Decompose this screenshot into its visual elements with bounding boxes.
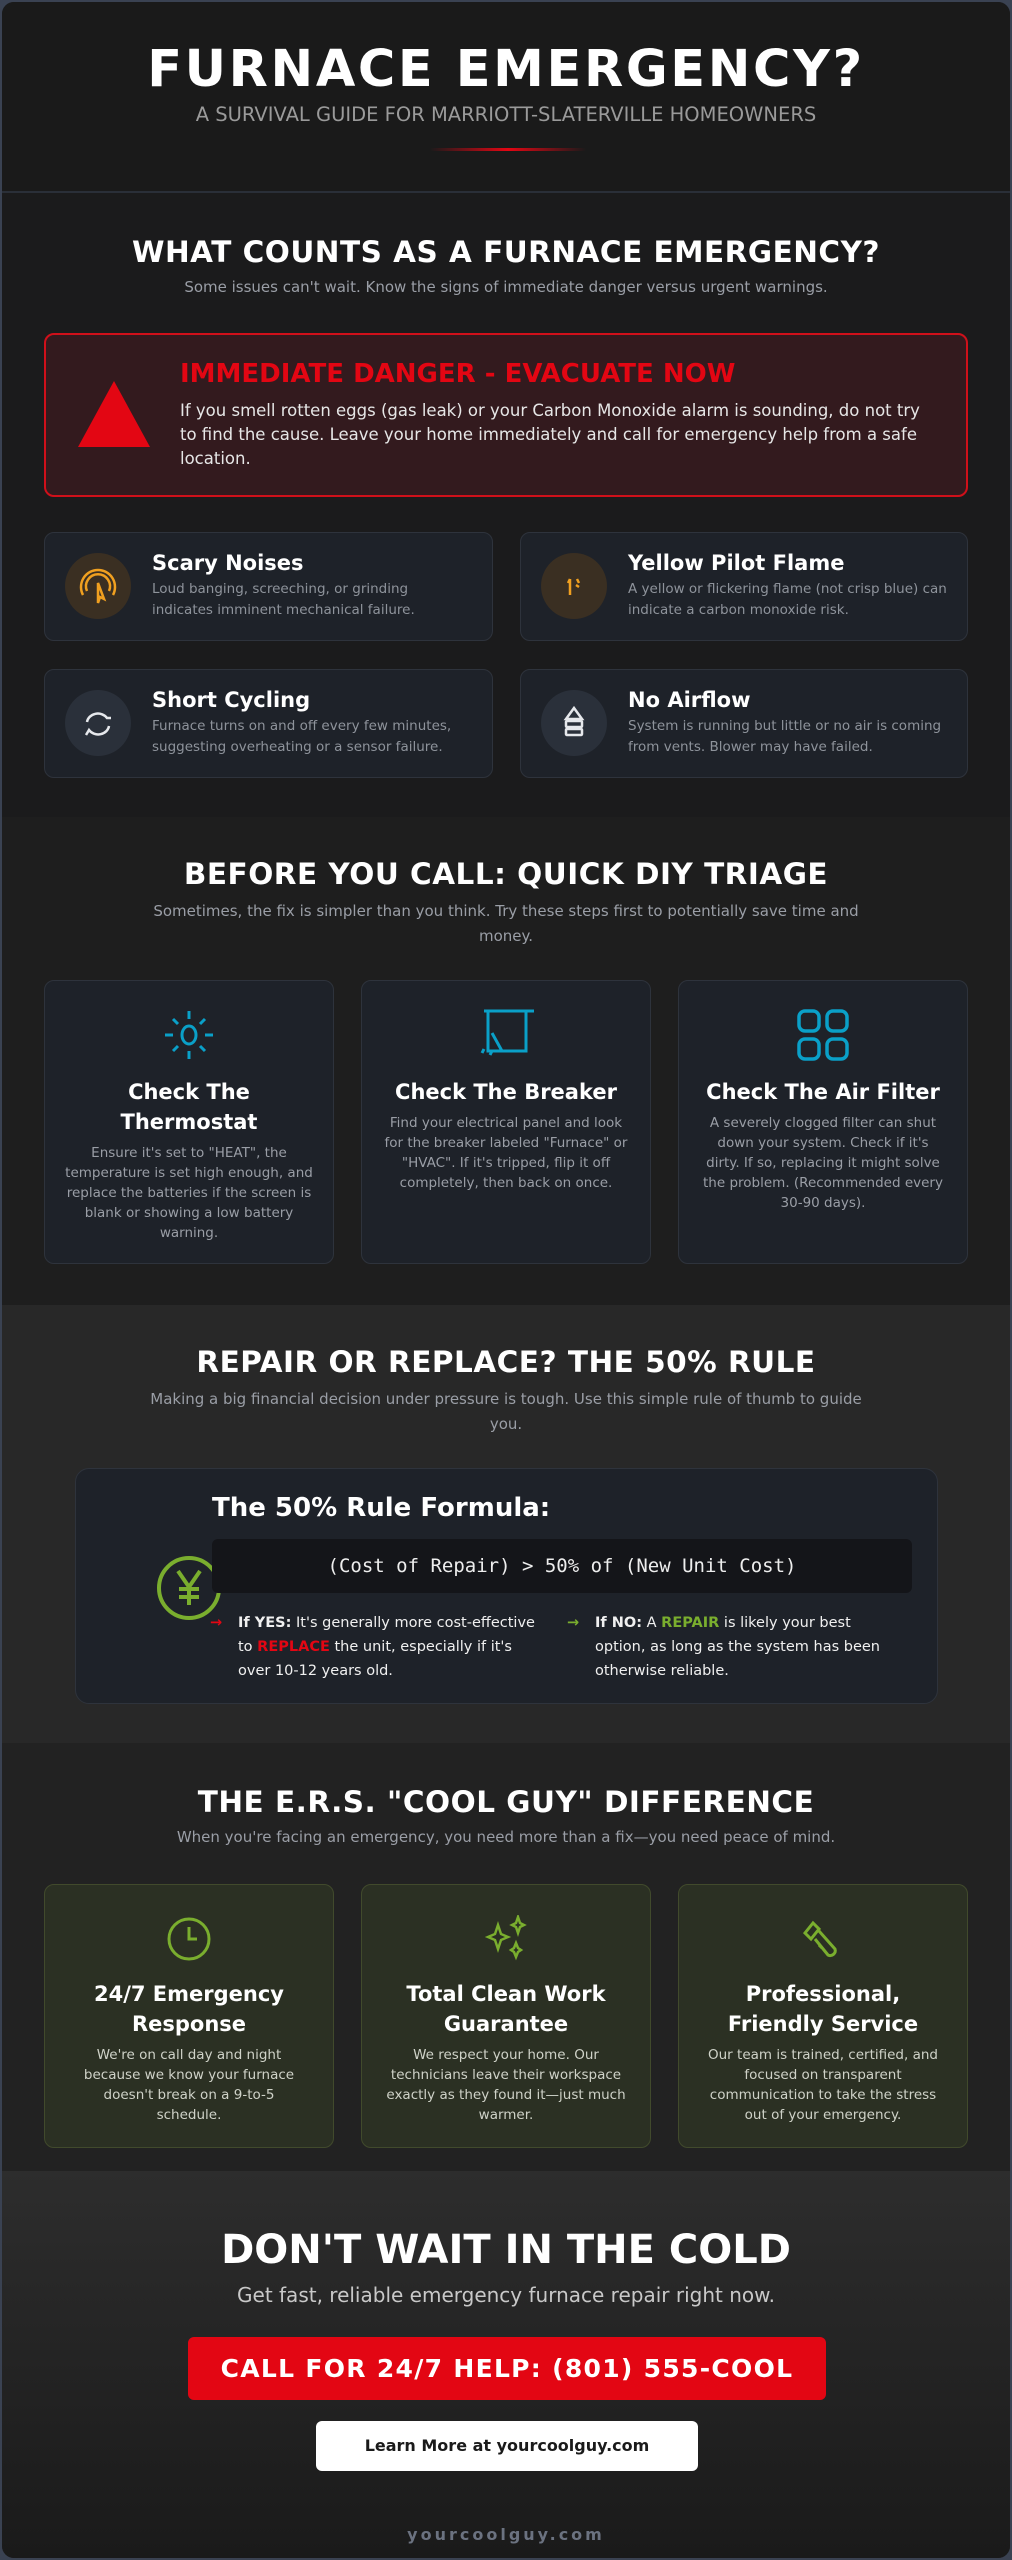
CTA subheading: Get fast, reliable emergency furnace repair right now. xyxy=(237,2283,775,2307)
icon: airflow xyxy=(541,690,607,756)
section: DIY triage xyxy=(2,817,1010,1305)
danger text: If you smell rotten eggs (gas leak) or your Carbon Monoxide alarm is sounding, do not try to find the cause. Leave your home immediately and call for emergency help from a safe location. xyxy=(180,401,920,468)
subheading: When you're facing an emergency, you need more than a fix—you need peace of mind. xyxy=(177,1828,835,1846)
card: scary noises: Scary Noises xyxy=(152,551,304,575)
subheading: Sometimes, the fix is simpler than you think. Try these steps first to potentially save time and money. xyxy=(153,902,859,945)
icon: warning triangle xyxy=(78,381,150,447)
card: breaker xyxy=(361,980,651,1264)
if yes: → xyxy=(210,1615,222,1631)
card: thermostat xyxy=(44,980,334,1264)
section: call to action xyxy=(2,2171,1010,2558)
icon: sun xyxy=(165,1011,213,1059)
formula box: (Cost of Repair) > 50% of (New Unit Cost) xyxy=(328,1555,796,1577)
section: difference xyxy=(2,1743,1010,2171)
if no: → xyxy=(567,1615,579,1631)
phone button: CALL FOR 24/7 HELP: (801) 555-COOL xyxy=(221,2354,793,2383)
website button xyxy=(316,2421,698,2471)
section: 50% rule xyxy=(2,1305,1010,1743)
icon: clock xyxy=(168,1918,210,1960)
card: short cycling: Short Cycling xyxy=(152,688,310,712)
card: short cycling xyxy=(44,669,493,778)
card: professional xyxy=(678,1884,968,2148)
card: 24/7: 24/7 Emergency Response xyxy=(94,1982,284,2036)
subheading: Making a big financial decision under pressure is tough. Use this simple rule of thumb to guide you. xyxy=(150,1390,862,1433)
card: thermostat: Check The Thermostat xyxy=(121,1080,257,1134)
section: emergency signs xyxy=(2,193,1010,817)
card: no airflow: System is running but little or no air is coming from vents. Blower may have failed. xyxy=(628,718,941,755)
icon: cycle xyxy=(65,690,131,756)
card: air filter xyxy=(678,980,968,1264)
heading: BEFORE YOU CALL: QUICK DIY TRIAGE xyxy=(184,857,828,891)
formula box xyxy=(212,1539,912,1593)
footer url: yourcoolguy.com xyxy=(407,2525,605,2544)
card: professional: Professional, Friendly Service xyxy=(728,1982,918,2036)
CTA heading: DON'T WAIT IN THE COLD xyxy=(221,2227,791,2273)
title: FURNACE EMERGENCY? xyxy=(147,40,865,99)
website button: Learn More at yourcoolguy.com xyxy=(365,2436,649,2455)
icon: tool xyxy=(803,1920,837,1958)
heading: THE E.R.S. "COOL GUY" DIFFERENCE xyxy=(198,1785,814,1819)
card: scary noises: Loud banging, screeching, or grinding indicates imminent mechanical failure. xyxy=(152,581,415,618)
card: breaker: Check The Breaker xyxy=(395,1080,617,1104)
subtitle: A SURVIVAL GUIDE FOR MARRIOTT-SLATERVILLE HOMEOWNERS xyxy=(196,103,816,126)
card: clean work xyxy=(361,1884,651,2148)
red accent line xyxy=(430,148,586,151)
card: air filter: Check The Air Filter xyxy=(706,1080,940,1104)
card: yellow pilot flame xyxy=(520,532,968,641)
card: breaker: Find your electrical panel and look for the breaker labeled "Furnace" or "HVAC". If it's tripped, flip it off completely, then back on once. xyxy=(384,1115,627,1191)
icon: noise xyxy=(65,553,131,619)
heading: REPAIR OR REPLACE? THE 50% RULE xyxy=(196,1345,816,1379)
icon: flame xyxy=(541,553,607,619)
icon: breaker panel xyxy=(480,1010,534,1056)
formula title: The 50% Rule Formula: xyxy=(212,1493,550,1523)
icon: sparkles xyxy=(485,1915,527,1960)
if yes: If YES: It's generally more cost-effective to REPLACE the unit, especially if it's over 10-12 years old. xyxy=(238,1615,535,1679)
card: thermostat: Ensure it's set to "HEAT", the temperature is set high enough, and replace the batteries if the screen is blank or showing a low battery warning. xyxy=(65,1145,313,1241)
danger title: IMMEDIATE DANGER - EVACUATE NOW xyxy=(180,359,735,389)
formula panel xyxy=(75,1468,938,1704)
subheading: Some issues can't wait. Know the signs of immediate danger versus urgent warnings. xyxy=(184,278,828,296)
card: clean work: Total Clean Work Guarantee xyxy=(406,1982,606,2036)
card: no airflow: No Airflow xyxy=(628,688,751,712)
card: clean work: We respect your home. Our technicians leave their workspace exactly as they found it—just much warmer. xyxy=(386,2047,626,2123)
card: air filter: A severely clogged filter can shut down your system. Check if it's dirty. If so, replacing it might solve the problem. (Recommended every 30-90 days). xyxy=(703,1115,943,1211)
card: professional: Our team is trained, certified, and focused on transparent communication to take the stress out of your emergency. xyxy=(708,2047,938,2123)
card: no airflow xyxy=(520,669,968,778)
phone button xyxy=(188,2337,826,2400)
card: 24/7 xyxy=(44,1884,334,2148)
card: yellow pilot flame: A yellow or flickering flame (not crisp blue) can indicate a carbon monoxide risk. xyxy=(628,581,947,618)
if no: If NO: A REPAIR is likely your best option, as long as the system has been otherwise reliable. xyxy=(595,1615,880,1679)
card: scary noises xyxy=(44,532,493,641)
header xyxy=(2,2,1010,193)
card: yellow pilot flame: Yellow Pilot Flame xyxy=(628,551,844,575)
icon: currency xyxy=(157,1556,221,1620)
card: 24/7: We're on call day and night because we know your furnace doesn't break on a 9-to-5 schedule. xyxy=(84,2047,294,2123)
danger callout xyxy=(44,333,968,497)
card: short cycling: Furnace turns on and off every few minutes, suggesting overheating or a sensor failure. xyxy=(152,718,451,755)
heading: WHAT COUNTS AS A FURNACE EMERGENCY? xyxy=(132,235,880,269)
icon: filter grid xyxy=(797,1009,849,1061)
